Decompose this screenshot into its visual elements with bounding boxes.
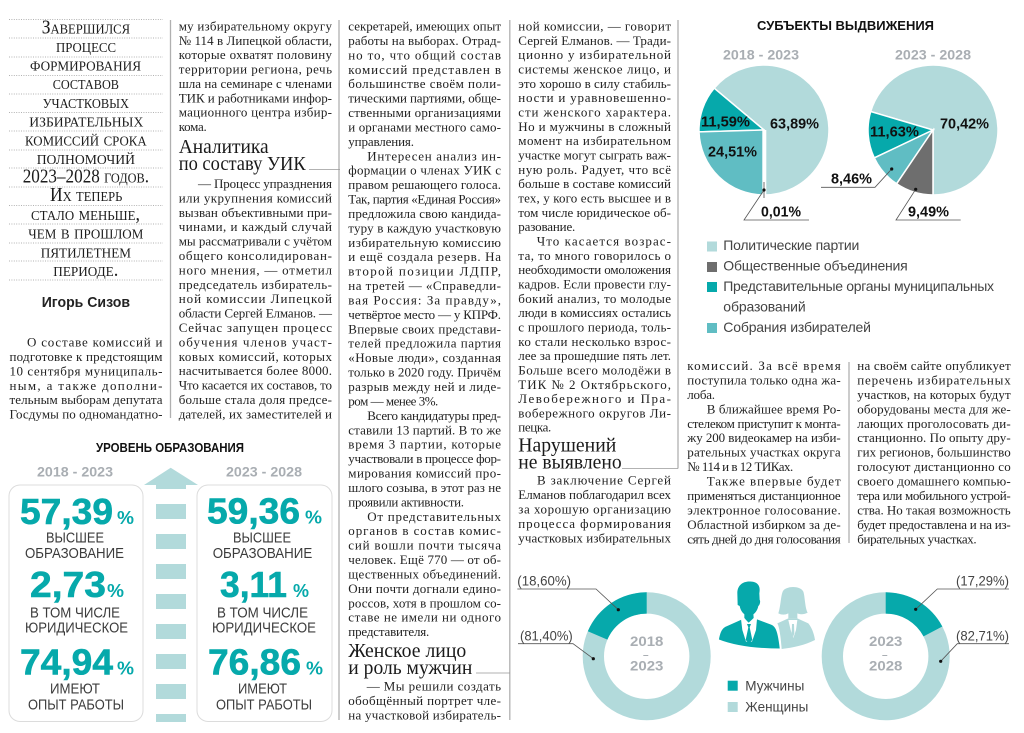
article column 4, bottom: В заключение Сергей xyxy=(537,472,671,488)
article column 3: представителя. xyxy=(348,624,429,639)
icon: woman and man silhouettes xyxy=(718,582,815,649)
article column 3: время 3 партии, которые xyxy=(348,437,501,452)
pie chart 2018-2023: 24,51% xyxy=(708,145,757,161)
panel: 2023-2028: 3,11 xyxy=(220,564,287,605)
article column 3: разрыв между ней и лиде- xyxy=(348,379,501,394)
panel: 2023-2028: ВЫСШЕЕ xyxy=(233,531,291,547)
article column 2, bottom: вызван объективными при- xyxy=(179,205,332,220)
education infographic xyxy=(9,441,332,722)
article column 2, bottom: — Процесс упразднения xyxy=(197,176,332,191)
article column 2, bottom: больше стала доля предсе- xyxy=(179,392,332,407)
panel: 2018-2023: ОПЫТ РАБОТЫ xyxy=(28,697,124,713)
author: Игорь Сизов xyxy=(42,295,130,311)
article column 2, bottom: ковых комиссий, которых xyxy=(179,349,332,364)
article column 2, top: мационного центра избир- xyxy=(179,105,332,120)
article column 6: голосуют дистанционно со xyxy=(857,459,1011,474)
panel: 2018-2023 xyxy=(9,485,143,722)
arrow up xyxy=(144,468,198,722)
panel: 2018-2023: 74,94 xyxy=(20,641,113,682)
panel: 2018-2023: ЮРИДИЧЕСКОЕ xyxy=(25,621,128,637)
article column 3: Так, партия «Единая Россия» xyxy=(348,192,501,206)
article column 5: стелеком приступит к монта- xyxy=(687,416,841,431)
article column 4 xyxy=(518,18,671,435)
article column 2, bottom: председатель избиратель- xyxy=(179,277,332,292)
article column 4: Больше всего молодёжи в xyxy=(518,362,671,377)
pie chart 2018-2023: 63,89% xyxy=(770,116,819,132)
pie legend: Политические партии xyxy=(723,237,859,253)
article column 4: пецка. xyxy=(518,420,551,435)
article column 4: люди в комиссиях остались xyxy=(518,305,671,320)
article column 3: вая Россия: За правду», xyxy=(348,292,501,308)
article column 3: ром — менее 3%. xyxy=(348,393,438,408)
article column 6: своего домашнего компью- xyxy=(857,474,1011,488)
gender legend: Мужчины xyxy=(745,678,804,694)
article column 6: перечень избирательных xyxy=(857,372,1011,387)
lead heading: полномочий xyxy=(37,148,135,169)
article column 3: второй позиции ЛДПР, xyxy=(348,264,501,279)
pie chart 2023-2028: 9,49% xyxy=(908,205,949,221)
lead heading: пятилетнем xyxy=(41,241,132,262)
article column 6: на своём сайте опубликует xyxy=(857,358,1011,373)
article column 4: бокий анализ, то молодые xyxy=(518,291,671,306)
article column 3: человек. Ещё 770 — от об- xyxy=(348,552,501,567)
article column 3: тическими партиями, обще- xyxy=(348,91,501,106)
lead heading: Завершился xyxy=(42,17,130,38)
donut 2 callouts xyxy=(914,573,1009,663)
article column 4: ционно у избирательной xyxy=(518,47,671,62)
article column 3: ставили 13 партий. В то же xyxy=(348,422,501,437)
panel: 2018-2023: % xyxy=(117,508,134,528)
article column 2, bottom: ной комиссии Липецкой xyxy=(179,291,332,306)
article column 2, bottom: общего консолидирован- xyxy=(179,248,332,263)
article column 2, bottom: Сейчас запущен процесс xyxy=(179,320,332,335)
article column 3: Интересен анализ ин- xyxy=(367,148,501,163)
article column 2, top: му избирательному округу xyxy=(179,18,332,34)
article column 3: сий вошли почти тысяча xyxy=(348,538,501,553)
article column 6: ства. Но такая возможность xyxy=(857,502,1011,517)
article column 4: момент на избирательном xyxy=(518,133,671,148)
panel: 2023-2028: 76,86 xyxy=(208,641,301,682)
article column 2, top: шла на семинаре с членами xyxy=(179,76,332,91)
article column 2, top: территории региона, речь xyxy=(179,62,332,77)
lead heading xyxy=(9,17,163,281)
article column 2, bottom: мы рассматривали с учётом xyxy=(179,234,332,249)
panel: 2018-2023: ИМЕЮТ xyxy=(50,681,100,697)
lead heading: участковых xyxy=(43,92,129,113)
article column 3: избирательную комиссию xyxy=(348,235,501,250)
donut chart 2018-2023 xyxy=(588,592,700,710)
article column 4: системы женское лицо, и xyxy=(518,62,671,76)
article column 4: том числе юридическое об- xyxy=(518,205,671,220)
article column 3: От представительных xyxy=(367,509,502,524)
article column 1 xyxy=(10,335,163,422)
article column 2, top: № 114 в Липецкой области, xyxy=(179,33,332,48)
article column 4: лее за прошедшие пять лет. xyxy=(518,348,671,363)
article column 4: больше в составе комиссий xyxy=(518,176,671,191)
donut chart 2023-2028: 2028 xyxy=(869,658,903,674)
article column 3: управления. xyxy=(348,134,414,149)
article column 3: туру в каждую участковую xyxy=(348,220,501,235)
article column 3: но то, что общий состав xyxy=(348,47,501,62)
article column 1: Госдумы по одномандатно- xyxy=(10,406,162,422)
panel: 2023-2028 xyxy=(197,485,332,722)
article column 4, bottom: участковых избирательных xyxy=(518,530,672,546)
donut chart 2023-2028: 2023 xyxy=(869,633,903,649)
article column 6: оборудованы места для же- xyxy=(857,401,1011,416)
article column 5 xyxy=(686,358,841,546)
donut 1 callouts: (18,60%) xyxy=(517,573,571,589)
pie chart 2023-2028: 8,46% xyxy=(831,171,872,187)
article column 1: ным, а также дополни- xyxy=(10,378,162,393)
article column 4: тех, у кого есть высшее и в xyxy=(518,190,671,206)
article column 5: Областной избирком за де- xyxy=(687,517,841,532)
article column 4: ко стали несколько взрос- xyxy=(518,334,671,349)
pie chart 2018-2023: 0,01% xyxy=(761,205,801,221)
article column 5: Также впервые будет xyxy=(707,474,841,488)
article column 4: Сергей Елманов. — Тради- xyxy=(518,33,671,48)
article column 2, bottom: дателей, их заместителей и xyxy=(179,406,332,421)
article column 4: разование. xyxy=(518,219,575,234)
pie chart 2023-2028 xyxy=(821,65,998,221)
lead heading: процесс xyxy=(56,36,116,57)
pie chart 2018-2023: 11,59% xyxy=(701,115,750,131)
article column 2, bottom: Что касается их составов, то xyxy=(179,378,332,393)
donut 1 callouts xyxy=(517,573,620,660)
article column 4: с прошлого периода, толь- xyxy=(518,319,671,334)
article column 4: та, то много говорилось о xyxy=(518,248,671,263)
article column 5: электронное голосование. xyxy=(687,502,841,517)
article column 4: ную роль. Радует, что всё xyxy=(518,162,671,177)
article column 3: и органами местного само- xyxy=(348,119,501,134)
article column 5: поступила только одна жа- xyxy=(687,372,841,387)
panel: 2023-2028: ОБРАЗОВАНИЕ xyxy=(213,546,313,562)
article column 3 xyxy=(348,18,502,639)
article column 2, bottom: обучения членов участ- xyxy=(179,334,332,349)
pie chart 2023-2028: 70,42% xyxy=(940,116,989,132)
article column 3, bottom: на участковой избиратель- xyxy=(348,707,501,722)
article column 2, top: кома. xyxy=(179,119,207,134)
article column 3: «Новые люди», созданная xyxy=(348,350,501,365)
article column 1: 10 сентября муниципаль- xyxy=(10,363,162,378)
article column 2, top: ТИК и работниками инфор- xyxy=(179,90,332,105)
pie legend: образований xyxy=(723,298,806,314)
article column 4: вобережного округов Ли- xyxy=(518,405,671,420)
panel: 2018-2023: 2,73 xyxy=(30,564,106,605)
article column 4, bottom: Елманов поблагодарил всех xyxy=(518,487,672,502)
article column 3: проявили активности. xyxy=(348,494,464,509)
article column 4: участке могут сыграть важ- xyxy=(518,148,671,162)
article column 3: россов, хотя в прошлом со- xyxy=(348,595,501,610)
panel: 2018-2023: 57,39 xyxy=(20,491,113,532)
donut chart 2018-2023: – xyxy=(643,650,649,661)
article column 4: Что касается возрас- xyxy=(537,234,671,248)
year label right: 2023 - 2028 xyxy=(226,465,303,480)
article column 3: телей предложила партия xyxy=(348,336,501,351)
article column 3: шлого созыва, в этот раз не xyxy=(348,480,501,495)
panel: 2023-2028: В ТОМ ЧИСЛЕ xyxy=(217,605,308,621)
year label pie 2: 2023 - 2028 xyxy=(895,47,972,62)
panel: 2023-2028: ИМЕЮТ xyxy=(238,681,287,697)
education title: УРОВЕНЬ ОБРАЗОВАНИЯ xyxy=(96,441,244,455)
panel: 2018-2023: В ТОМ ЧИСЛЕ xyxy=(30,605,120,621)
pie chart 2023-2028: 11,63% xyxy=(870,125,919,141)
subheading: female face: и роль мужчин xyxy=(348,658,472,679)
article column 3, bottom: — Мы решили создать xyxy=(366,678,501,694)
article column 1: тельным выборам депутата xyxy=(10,392,163,407)
donut chart 2018-2023: 2018 xyxy=(630,633,664,649)
article column 3: участвовали в процессе фор- xyxy=(348,451,501,466)
article column 3: предложила свою кандида- xyxy=(348,206,501,221)
article column 6: тера или мобильного устрой- xyxy=(857,488,1011,503)
panel: 2023-2028: 59,36 xyxy=(207,490,300,532)
pie legend: Собрания избирателей xyxy=(723,319,871,335)
subheading: analytics: по составу УИК xyxy=(179,154,307,175)
article column 3: Они почти догнали едино- xyxy=(348,581,501,596)
article column 3: Впервые своих представи- xyxy=(348,321,501,336)
article column 3: щественных объединений. xyxy=(348,566,501,582)
article column 6: бирательных участках. xyxy=(857,531,977,546)
nomination subjects infographic xyxy=(699,19,998,335)
article column 2, top xyxy=(179,18,332,134)
article column 6: лающих проголосовать ди- xyxy=(857,416,1011,431)
article column 4, bottom: процесса формирования xyxy=(518,516,671,531)
gender legend: Женщины xyxy=(745,699,808,715)
article column 2, bottom: ного мнения, — отметил xyxy=(179,262,332,277)
panel: 2023-2028: % xyxy=(293,581,309,601)
article column 4: ТИК № 2 Октябрьского, xyxy=(518,377,671,392)
article column 4: ности и уравновешенно- xyxy=(518,90,671,105)
article column 4: Но и мужчины в сложный xyxy=(518,119,671,134)
article column 4: это хорошо в силу стабиль- xyxy=(518,76,671,91)
article column 3: ственными организациями xyxy=(348,105,501,120)
pie legend: Общественные объединения xyxy=(723,258,908,274)
subheading: no violations: Нарушений xyxy=(518,436,616,457)
pie legend xyxy=(707,237,994,335)
article column 1: подготовке к предстоящим xyxy=(10,349,162,364)
pie chart 2018-2023 xyxy=(699,65,829,221)
subheading: female face: Женское лицо xyxy=(348,641,466,662)
article column 3: четвёртое место — у КПРФ. xyxy=(348,307,501,322)
article column 3: комиссий представлен в xyxy=(348,62,501,77)
article column 3: на третей — «Справедли- xyxy=(348,278,501,293)
article column 2, bottom: или укрупнения комиссий xyxy=(179,190,332,205)
panel: 2018-2023: % xyxy=(107,581,124,601)
article column 3: секретарей, имеющих опыт xyxy=(348,18,501,34)
subheading: no violations xyxy=(518,436,678,473)
nomination title: СУБЪЕКТЫ ВЫДВИЖЕНИЯ xyxy=(757,19,934,33)
donut 2 callouts: (82,71%) xyxy=(956,628,1009,644)
lead heading: периоде. xyxy=(53,260,118,281)
article column 3: формации о членах УИК с xyxy=(348,163,501,178)
lead heading: чем в прошлом xyxy=(28,223,144,244)
lead heading: комиссий срока xyxy=(25,129,148,150)
article column 5: лоба. xyxy=(687,387,715,402)
article column 4: необходимости омоложения xyxy=(518,262,671,277)
subheading: analytics xyxy=(179,137,340,175)
donut chart 2023-2028: – xyxy=(882,650,888,661)
panel: 2023-2028: ЮРИДИЧЕСКОЕ xyxy=(212,621,316,637)
panel: 2023-2028: % xyxy=(306,658,323,678)
lead heading: стало меньше, xyxy=(31,204,140,225)
article column 5: применяться дистанционное xyxy=(687,488,841,503)
article column 2, bottom xyxy=(179,176,333,421)
article column 4: кадров. Если провести глу- xyxy=(518,276,671,291)
article column 5: В ближайшее время Ро- xyxy=(707,401,841,416)
article column 4: Левобережного и Пра- xyxy=(518,391,671,406)
donut 2 callouts: (17,29%) xyxy=(956,573,1009,589)
article column 3: ставе не имели ни одного xyxy=(348,610,501,625)
gender infographic xyxy=(517,573,1009,715)
year label left: 2018 - 2023 xyxy=(37,465,114,480)
panel: 2018-2023: ВЫСШЕЕ xyxy=(46,531,104,547)
panel: 2023-2028: % xyxy=(305,508,322,528)
lead heading: 2023–2028 годов. xyxy=(23,166,149,187)
pie legend: Представительные органы муниципальных xyxy=(723,278,994,294)
article column 6: участков, на которых будут xyxy=(857,387,1011,402)
panel: 2018-2023: % xyxy=(117,658,134,678)
subheading: female face xyxy=(348,641,510,679)
panel: 2018-2023: ОБРАЗОВАНИЕ xyxy=(25,546,124,562)
article column 4: ной комиссии, — говорит xyxy=(518,18,671,34)
article column 1: О составе комиссий и xyxy=(27,335,163,350)
subheading: analytics: Аналитика xyxy=(179,137,269,158)
article column 5: комиссий. За всё время xyxy=(687,358,841,373)
article column 3: правом решающего голоса. xyxy=(348,177,501,192)
lead heading: Их теперь xyxy=(50,185,122,206)
article column 5: сять дней до дня голосования xyxy=(687,531,841,546)
gender legend xyxy=(728,678,808,715)
panel: 2023-2028: ОПЫТ РАБОТЫ xyxy=(216,697,312,713)
donut chart 2018-2023: 2023 xyxy=(630,658,664,674)
year label pie 1: 2018 - 2023 xyxy=(723,47,800,62)
article column 5: рательных участках округа xyxy=(687,445,841,460)
article column 6: станционно. По опыту дру- xyxy=(857,430,1011,445)
donut chart 2023-2028 xyxy=(832,592,942,710)
article column 4, bottom xyxy=(518,472,672,546)
article column 2, bottom: насчитывается более 8000. xyxy=(179,363,332,378)
article column 2, top: которые охватят половину xyxy=(179,47,332,62)
article column 3: большинстве своём поли- xyxy=(348,76,501,91)
article column 6: гих регионов, большинство xyxy=(857,445,1011,460)
article column 4, bottom: за хорошую организацию xyxy=(518,502,671,516)
article column 2, bottom: чинами, и каждый случай xyxy=(179,219,332,234)
article column 3, bottom xyxy=(348,678,501,722)
article column 5: № 114 и в 12 ТИКах. xyxy=(687,459,793,474)
article column 3: только в 2020 году. Причём xyxy=(348,365,501,380)
article column 3: мирования комиссий про- xyxy=(348,466,501,480)
lead heading: избирательных xyxy=(29,111,143,132)
article column 3, bottom: обобщённый портрет чле- xyxy=(348,693,501,708)
article column 3: работы на выборах. Отрад- xyxy=(348,33,501,48)
article column 2, bottom: области Сергей Елманов. — xyxy=(179,306,333,321)
article column 6 xyxy=(857,358,1011,546)
article column 4: сти женского характера. xyxy=(518,104,671,120)
article column 5: жу 200 видеокамер на изби- xyxy=(686,430,841,445)
article column 6: будет предоставлена и на из- xyxy=(857,517,1011,532)
article column 3: Всего кандидатуры пред- xyxy=(367,408,501,423)
article column 3: и ещё создала резерв. На xyxy=(348,249,501,264)
donut 1 callouts: (81,40%) xyxy=(520,628,573,644)
lead heading: формирования xyxy=(30,55,141,76)
column separators xyxy=(170,20,849,720)
lead heading: составов xyxy=(53,73,119,94)
subheading: no violations: не выявлено xyxy=(518,452,622,473)
article column 3: органов в состав комис- xyxy=(348,523,501,538)
